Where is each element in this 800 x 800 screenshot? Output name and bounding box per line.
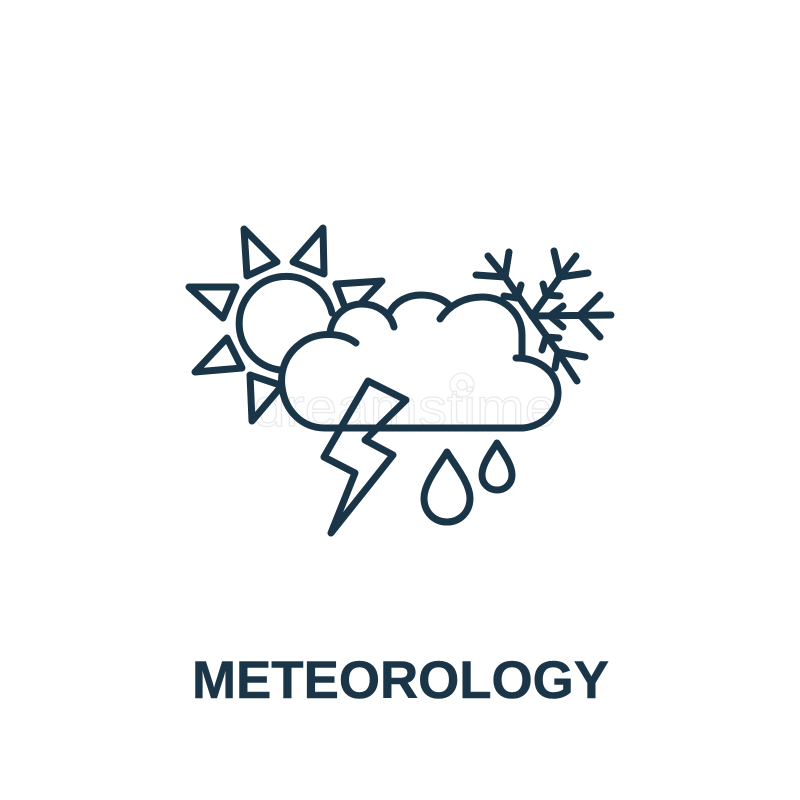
cloud lobe: second bbox=[330, 304, 394, 332]
snowflake arm: upper right bbox=[532, 251, 588, 316]
watermark: dreamstime bbox=[253, 378, 557, 438]
snowflake arm: lower right bbox=[532, 316, 585, 381]
icon: cloud bbox=[282, 295, 558, 428]
sun ray: left bbox=[189, 287, 236, 318]
title: METEOROLOGY bbox=[192, 651, 609, 710]
sun ray: top left bbox=[244, 229, 277, 276]
sun ray: top right bbox=[293, 228, 324, 274]
weather icon bbox=[189, 228, 611, 533]
snowflake arm: right bbox=[532, 295, 611, 337]
icon: snowflake bbox=[476, 251, 611, 381]
cloud lobe: third bbox=[390, 295, 450, 312]
cloud lobe: fourth bbox=[440, 297, 522, 357]
sun ray: bottom bbox=[250, 375, 280, 421]
sun disc bbox=[239, 276, 332, 370]
icon: lightning bolt bbox=[324, 381, 406, 533]
icon: small rain drop bbox=[482, 443, 512, 490]
sun ray: right bbox=[336, 281, 382, 305]
sun ray: lower left bbox=[195, 338, 242, 372]
cloud outline bbox=[282, 334, 558, 428]
snowflake arm: upper left bbox=[476, 252, 532, 316]
icon: sun bbox=[189, 228, 382, 421]
icon: large rain drop bbox=[424, 452, 470, 522]
